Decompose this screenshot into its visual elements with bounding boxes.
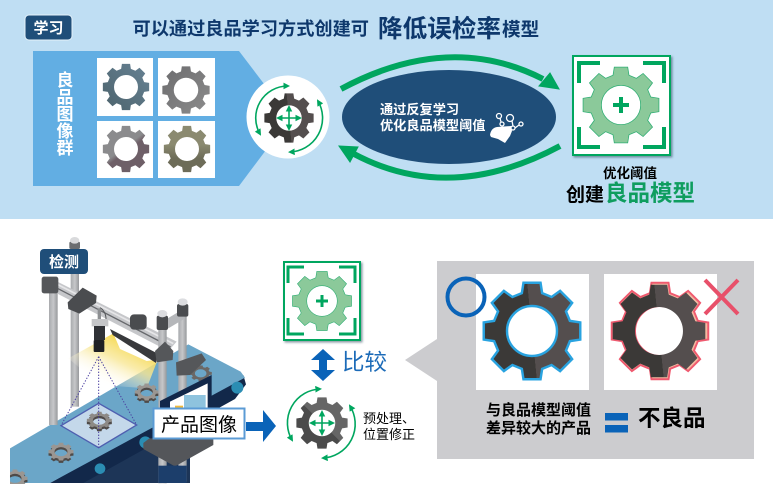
panel: good product image group xyxy=(33,51,290,186)
front posts xyxy=(158,327,167,483)
image tile 3 xyxy=(97,121,153,178)
belt gears xyxy=(3,365,212,484)
text: large difference: 与良品模型阈值 xyxy=(486,401,591,419)
title: 模型 xyxy=(502,19,539,40)
title xyxy=(132,15,539,43)
vertical label: 良 xyxy=(56,70,74,90)
vertical label: 品 xyxy=(56,88,74,107)
icon: preprocessing gear xyxy=(287,389,355,458)
image tile 2 xyxy=(158,58,215,116)
icon: cross mark xyxy=(705,280,738,314)
beam xyxy=(42,277,177,363)
vertical label: 群 xyxy=(56,138,74,158)
defect sample tile xyxy=(604,274,717,390)
monitor xyxy=(160,375,212,448)
image tile 1 xyxy=(97,58,153,116)
back posts xyxy=(49,292,58,425)
icon: AI head xyxy=(490,114,523,143)
panel: learning background xyxy=(0,0,773,219)
text: preprocessing and position correction: 预处理、 xyxy=(363,411,415,426)
text: large difference: 差异较大的产品 xyxy=(486,419,591,437)
ellipse: repeated learning xyxy=(342,70,556,164)
ellipse: repeated learning: 优化良品模型阈值 xyxy=(380,117,486,133)
icon: good product model xyxy=(573,56,670,155)
icon: good model small xyxy=(284,262,360,340)
camera xyxy=(92,308,108,352)
icon: equals xyxy=(605,413,628,432)
badge: learning: 学习 xyxy=(33,19,64,37)
loop arrow: top xyxy=(341,57,559,89)
arrow: product image to processing xyxy=(246,410,276,442)
image tile 4 xyxy=(158,121,215,178)
good sample tile xyxy=(476,274,589,390)
text: defective: 不良品 xyxy=(638,406,706,431)
illustration: inspection conveyor xyxy=(3,237,246,484)
label: product image: 产品图像 xyxy=(161,414,237,436)
text: preprocessing and position correction: 位置修正 xyxy=(363,427,415,442)
title: 降低误检率 xyxy=(378,15,501,43)
badge: inspection xyxy=(40,249,88,274)
panel: comparison result xyxy=(405,261,754,459)
monitor stand xyxy=(143,438,213,466)
icon: circle mark xyxy=(448,278,484,316)
icon: preprocessing gear in circle xyxy=(246,76,330,158)
text: optimise threshold: 优化阈值 xyxy=(603,165,657,181)
ellipse: repeated learning: 通过反复学习 xyxy=(380,101,459,117)
loop arrow: bottom xyxy=(339,146,560,178)
vertical label: 像 xyxy=(56,122,74,141)
title: 可以通过良品学习方式创建可 xyxy=(132,18,369,39)
text: create good model: 创建良品模型 xyxy=(566,181,695,206)
text: compare: 比较 xyxy=(342,350,387,375)
arrow panel shape xyxy=(33,51,290,186)
badge: inspection: 检测 xyxy=(49,253,79,271)
arrow: compare up-down xyxy=(311,349,335,381)
callout shape xyxy=(405,261,754,459)
belt surface xyxy=(10,344,245,483)
belt lower structure xyxy=(80,435,190,483)
inspected gear on belt xyxy=(61,357,137,448)
badge: learning xyxy=(25,15,72,40)
camera light xyxy=(68,333,157,388)
label: product image xyxy=(154,408,244,438)
vertical label: 图 xyxy=(56,105,74,124)
